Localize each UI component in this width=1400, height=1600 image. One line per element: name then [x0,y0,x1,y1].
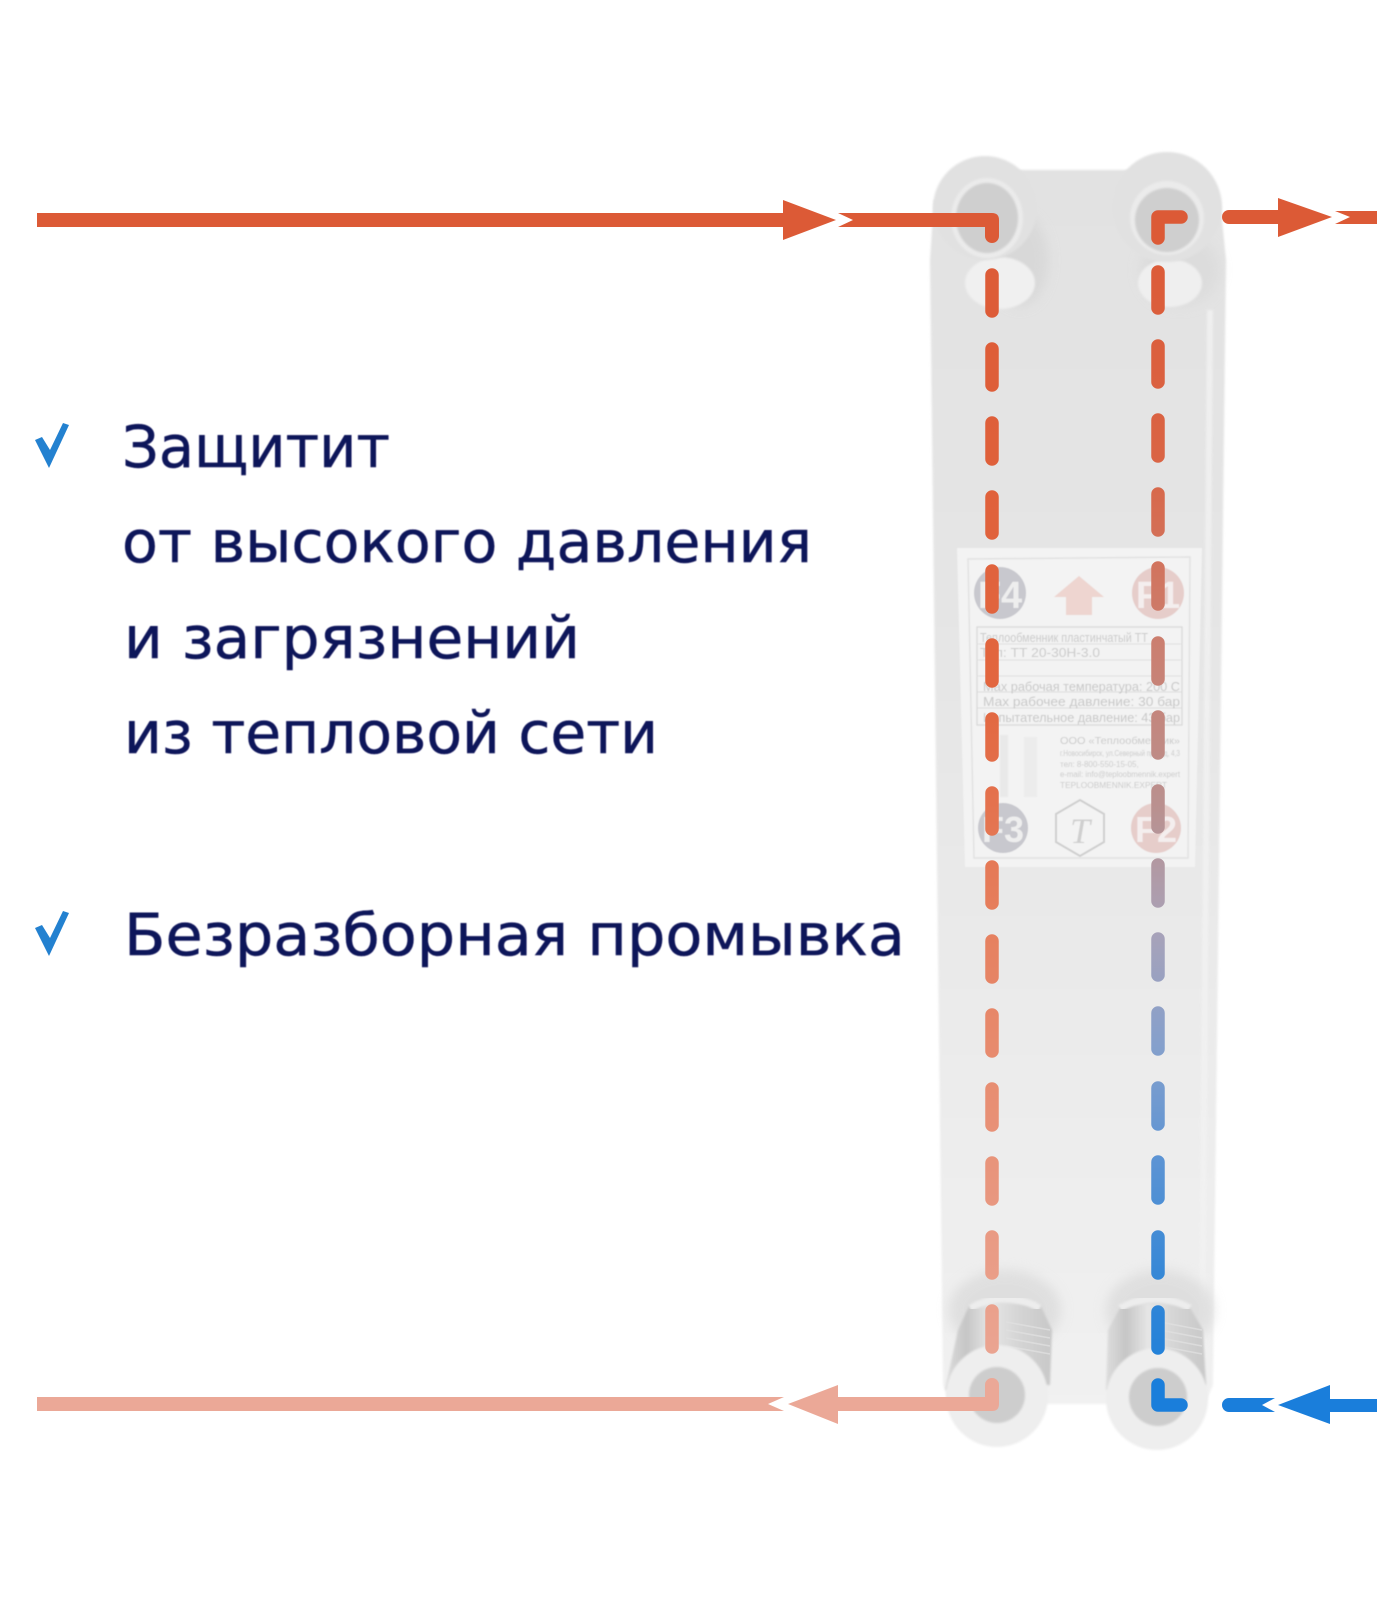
heated flow out: top right elbow [1158,217,1181,238]
label badge F1 [1132,567,1184,619]
product label [957,548,1202,867]
label logo hexagon: T [1070,811,1093,851]
check mark 1 [35,423,69,468]
heat exchanger plate photo [930,152,1226,1450]
label company details: тел: 8-800-550-15-05, [1060,760,1139,769]
hot flow down: left dashed line [985,275,999,1347]
cooled flow out: bottom left pipe [37,1378,999,1424]
label badge F3 [978,803,1028,853]
top left fitting [933,156,1048,309]
label specification table [977,627,1182,725]
hot flow in: top left pipe [37,200,999,243]
label specification table: Тип: ТТ 20-30Н-3.0 [980,645,1100,660]
label badge F3: F3 [982,809,1024,850]
label badge F4 [974,567,1026,619]
label badge F2: F2 [1135,809,1177,850]
cold flow up: right dashed line [1151,272,1165,1348]
label specification table: Мах рабочая температура: 200 С [983,679,1180,694]
label badge F2 [1131,803,1181,853]
benefit text: flushing: Безразборная промывка [124,901,905,969]
label up arrow [1054,576,1104,615]
label logo hexagon [1056,800,1104,856]
label badge F1: F1 [1136,575,1180,617]
heated flow out: top right arrow [1222,198,1377,237]
benefit text: protection: и загрязнений [124,604,580,672]
benefit text: protection: Защитит [122,413,390,481]
label company details: e-mail: info@teploobmennik.expert [1060,770,1181,779]
benefit text: protection: из тепловой сети [124,699,658,767]
label company details: ООО «Теплообменник» [1060,735,1180,747]
bottom left fitting [945,1270,1061,1447]
plate body [930,170,1226,1404]
label QR strip [1000,735,1037,797]
label specification table: Теплообменник пластинчатый ТТ [980,630,1148,645]
benefit text: protection: от высокого давления [122,508,812,576]
plate side highlight [1199,310,1213,1370]
label company details: TEPLOOBMENNIK.EXPERT [1060,781,1167,790]
bottom right fitting [1106,1270,1214,1450]
label company details: г.Новосибирск, ул.Северный проезд, 4,3 [1060,749,1180,758]
label specification table: Мах рабочее давление: 30 бар [983,694,1180,709]
label specification table: Испытательное давление: 43 бар [983,710,1180,725]
benefit text: protection [122,413,812,767]
top right fitting [1112,152,1222,307]
label badge F4: F4 [978,575,1022,617]
check mark 2 [35,911,69,956]
label company details [1060,735,1181,790]
cold flow in: bottom right arrow [1222,1385,1377,1424]
cold flow in: bottom right elbow [1158,1385,1181,1405]
